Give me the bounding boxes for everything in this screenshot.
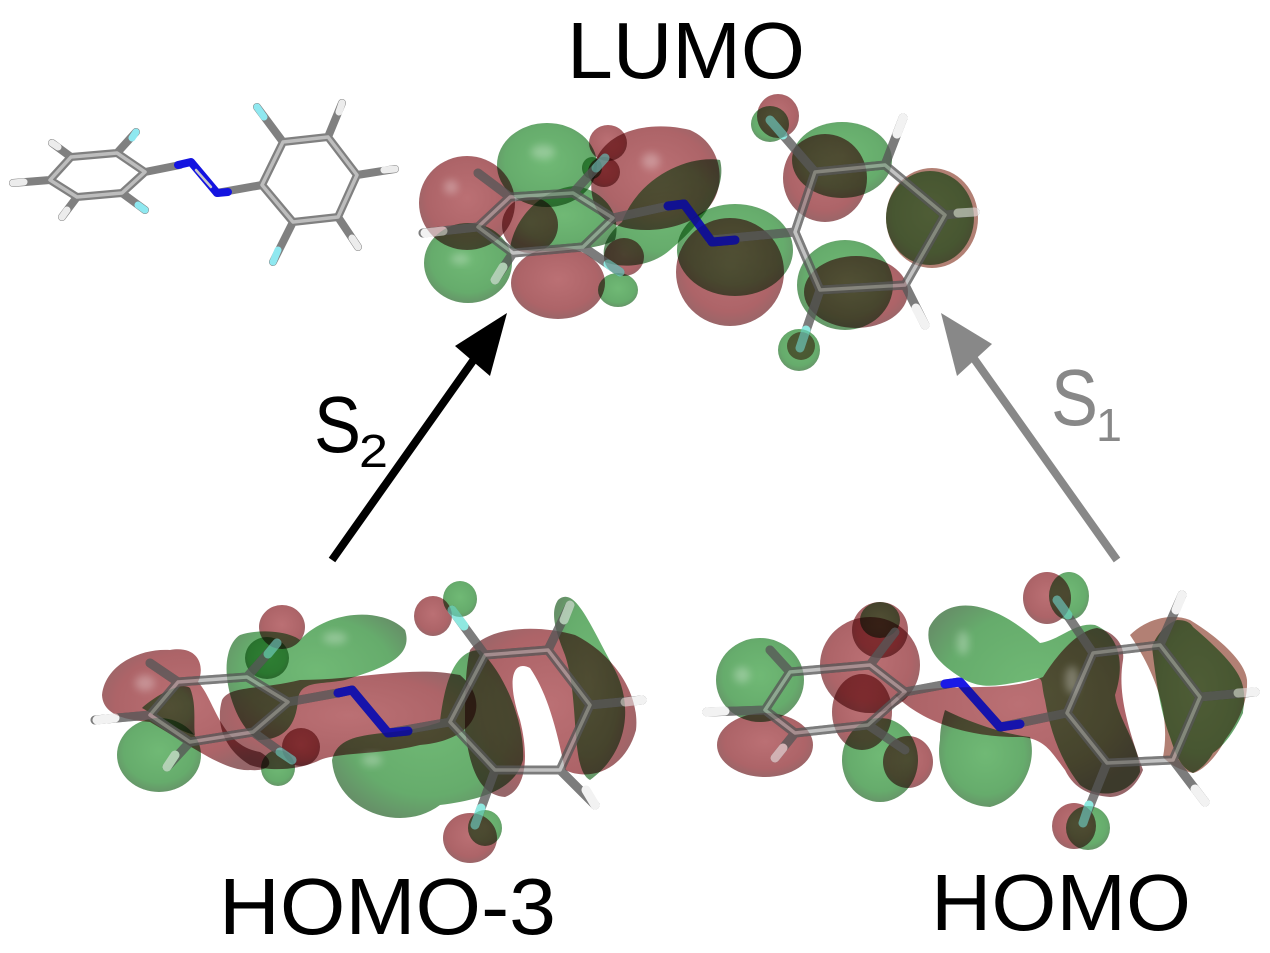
- label: HOMO-3: HOMO-3: [219, 862, 556, 951]
- arrow: S2 transition: [332, 313, 507, 560]
- label: S1: [1051, 353, 1122, 451]
- molecule structure: top left: [13, 103, 395, 262]
- label: S1: 1: [1096, 399, 1122, 451]
- arrow: S1 transition: [941, 313, 1117, 560]
- label: S2: S: [314, 380, 361, 469]
- label: S1: S: [1051, 353, 1098, 442]
- orbital: HOMO: [707, 572, 1255, 850]
- title: LUMO: LUMO: [567, 6, 805, 95]
- orbital: HOMO-3: [95, 581, 642, 863]
- label: S2: 2: [359, 425, 388, 477]
- label: HOMO: HOMO: [931, 858, 1191, 947]
- orbital: LUMO: [419, 94, 978, 371]
- label: S2: [314, 380, 388, 477]
